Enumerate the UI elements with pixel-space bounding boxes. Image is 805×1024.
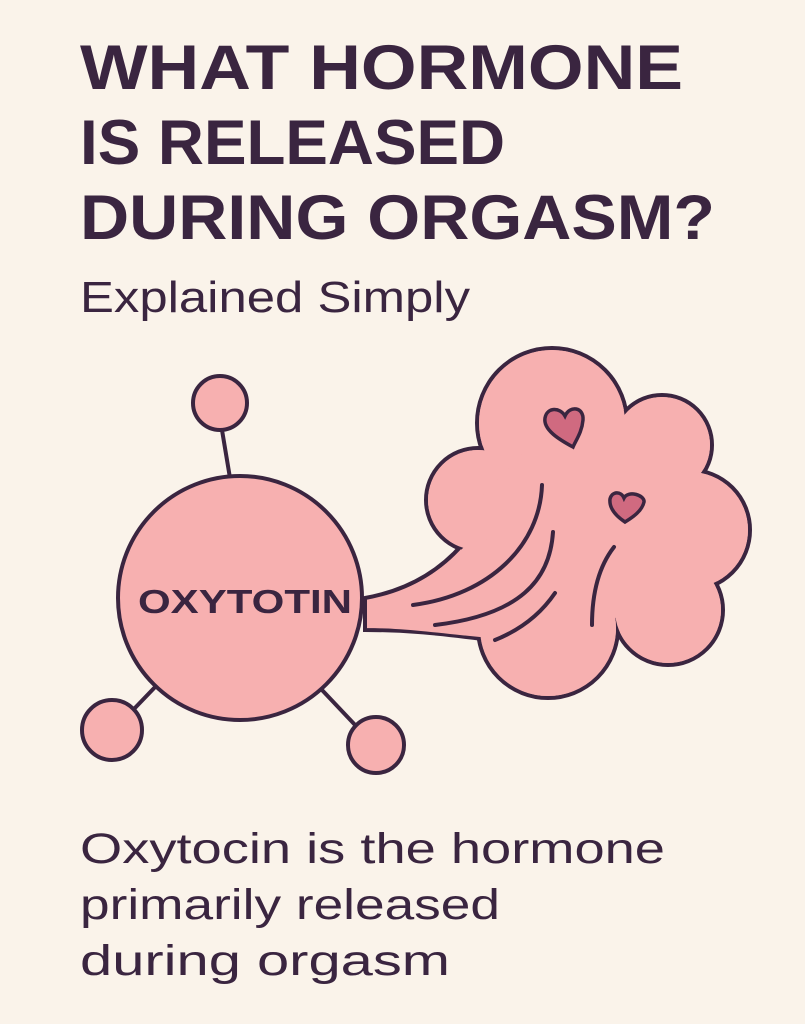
title [80, 33, 715, 253]
molecule: oxytocin [82, 376, 404, 773]
title: WHAT HORMONE [80, 33, 683, 103]
icon: cloud of hearts [365, 348, 750, 698]
caption: Oxytocin is the hormone [80, 825, 665, 873]
icon: heart [545, 409, 583, 447]
subtitle: Explained Simply [80, 273, 470, 322]
caption: during orgasm [80, 937, 450, 985]
title: IS RELEASED [80, 108, 505, 178]
caption [80, 825, 665, 985]
caption: primarily released [80, 881, 500, 929]
label: OXYTOTIN: OXYTOTIN [138, 583, 352, 620]
title: DURING ORGASM? [80, 183, 715, 253]
icon: heart small [610, 493, 644, 522]
